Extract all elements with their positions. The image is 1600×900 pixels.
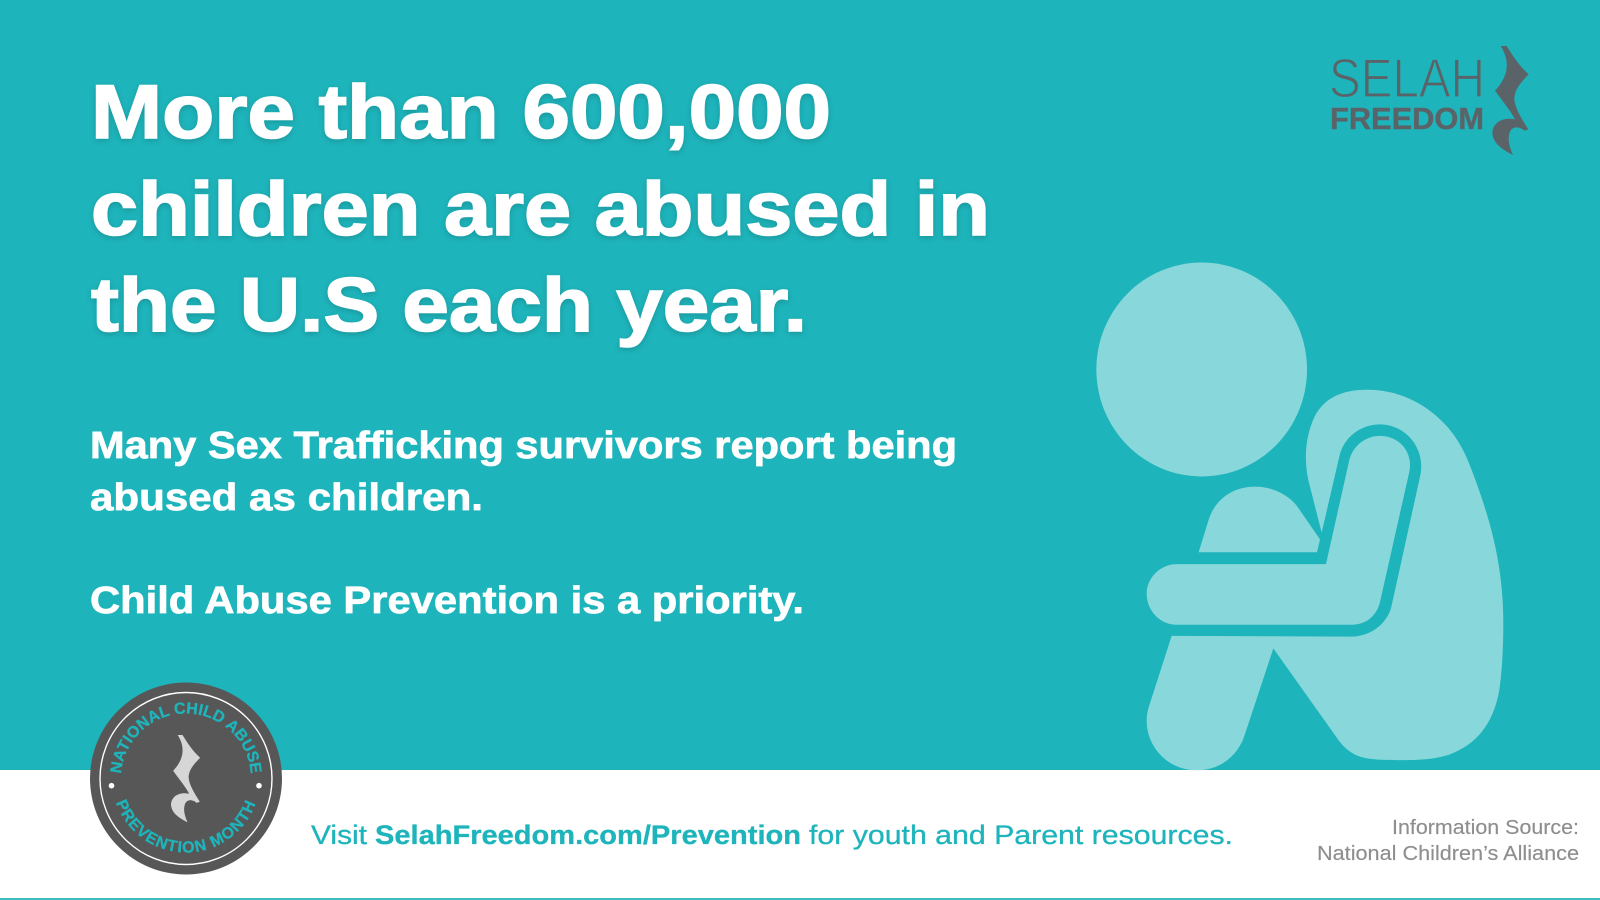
information source [1317,817,1579,865]
logo: Selah Freedom [1329,46,1529,155]
supporting text: survivors: abused as children. [90,477,483,519]
white footer band [0,770,1600,898]
headline [91,70,990,348]
headline: the U.S each year. [91,263,807,348]
logo mark: rest symbol [1492,46,1529,155]
icon body and leg [1147,390,1503,770]
badge disc [90,682,282,874]
footer bottom rule [0,898,1600,900]
footer call to action: SelahFreedom.com/Prevention [375,820,801,850]
headline: More than 600,000 [91,70,831,155]
badge symbol [171,735,200,822]
footer call to action [311,820,1233,850]
supporting text: survivors: Many Sex Trafficking survivors report being [90,425,957,467]
badge dots [109,783,262,788]
icon head [1096,263,1307,476]
logo wordmark: SELAH: SELAH [1329,47,1485,109]
badge text: bottom arc: PREVENTION MONTH [116,799,256,853]
icon knee [1199,487,1320,552]
information source: Information Source: [1392,817,1579,839]
icon: seated child hugging knees [1096,263,1503,770]
supporting text: survivors [90,425,957,519]
footer call to action: Visit [311,820,368,850]
footer call to action: for youth and Parent resources. [809,820,1233,850]
icon arm [1147,436,1410,625]
supporting text: priority: Child Abuse Prevention is a priority. [90,580,804,622]
information source: National Children’s Alliance [1317,843,1579,865]
badge ring [100,692,272,864]
badge text: top arc: NATIONAL CHILD ABUSE [110,702,262,774]
badge: National Child Abuse Prevention Month [90,682,282,874]
logo wordmark: FREEDOM: FREEDOM [1330,101,1484,136]
headline: children are abused in [91,167,990,252]
